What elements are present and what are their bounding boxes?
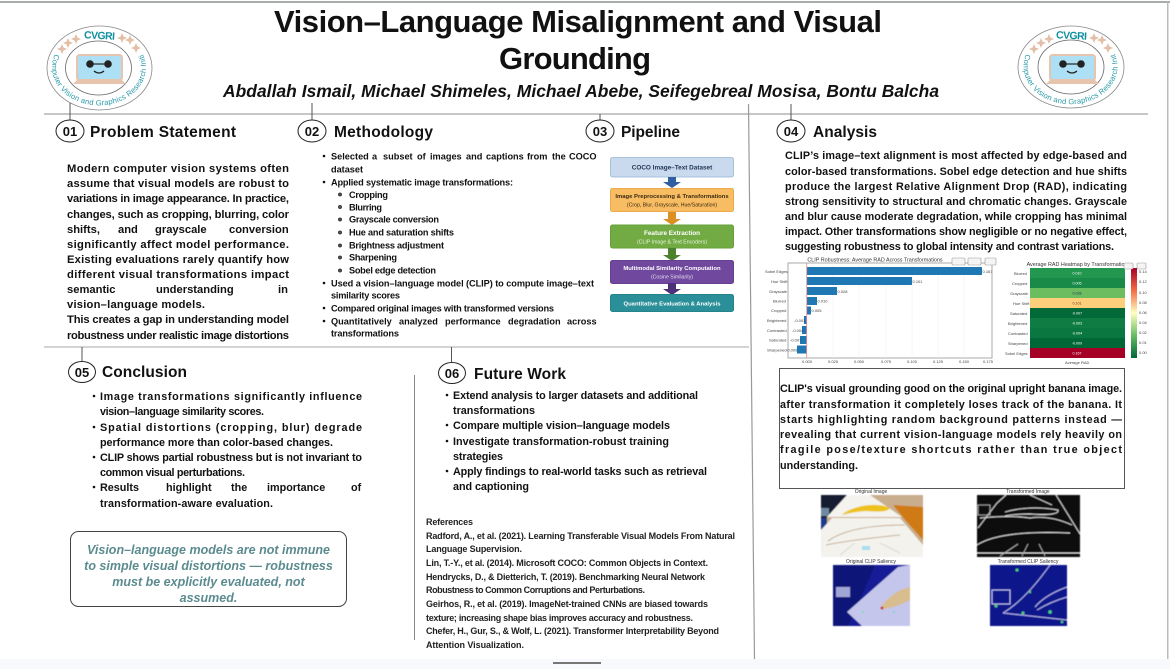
bar chart: average RAD across transformations: -0.004 [792, 328, 804, 333]
bar chart: average RAD across transformations: -0.009 [786, 348, 798, 352]
heatmap: average RAD by transformation: 0.12 [1139, 279, 1148, 284]
callout: key takeaway: assumed. [180, 591, 237, 605]
logo: CVGRI right: CVGRI [1056, 29, 1087, 43]
heatmap: average RAD by transformation: 0.08 [1139, 300, 1148, 305]
references: Language Supervision. [426, 544, 522, 554]
conclusion list: highlight [166, 482, 212, 494]
heading: problem statement: Problem Statement [90, 124, 236, 141]
future work list: Compare multiple vision–language models [453, 420, 670, 432]
problem text: Modern computer vision systems often [67, 163, 289, 175]
bar chart: average RAD across transformations: CLIP Robustness: Average RAD Across Transformations [807, 258, 943, 264]
arrow: green [663, 248, 681, 261]
step: preprocessing: (Crop, Blur, Grayscale, Hue/Saturation) [627, 202, 717, 208]
bar chart: average RAD across transformations: 0.000 [802, 359, 813, 364]
number badge 05: 05 [75, 365, 89, 380]
toolbar icons [1124, 263, 1146, 269]
conclusion list: performance more than color-based changes. [100, 437, 333, 449]
references: Chefer, H., Gur, S., & Wolf, L. (2021). Transformer Interpretability Beyond [426, 626, 719, 636]
conclusion list: Results [100, 482, 139, 494]
step: preprocessing [610, 188, 734, 212]
number badge 01 [56, 120, 84, 142]
callout: visual grounding [780, 368, 1124, 488]
bar chart: average RAD across transformations: Grayscale [769, 289, 788, 294]
heatmap: average RAD by transformation: 0.01 [1139, 340, 1148, 345]
methodology list: Quantitatively [331, 316, 393, 326]
heading: future work: Future Work [474, 366, 566, 383]
step: feature extraction [610, 225, 734, 248]
callout: visual grounding: revealing that current vision-language models rely heavily on [780, 429, 1122, 441]
heatmap: average RAD by transformation: Cropped [1012, 281, 1027, 286]
heatmap: average RAD by transformation: 0.04 [1139, 320, 1148, 325]
references: Hendrycks, D., & Dietterich, T. (2019). Benchmarking Neural Network [426, 572, 706, 582]
panel: methodology [298, 103, 597, 338]
step: dataset [610, 158, 734, 177]
callout: key takeaway: must be explicitly evaluated, not [112, 575, 306, 589]
analysis text: and blur cause moderate degradation, while cropping has minimal [785, 211, 1127, 223]
problem text: significantly affect model performance. [67, 239, 289, 251]
number badge 02 [298, 120, 326, 142]
heatmap: average RAD by transformation: -0.004 [1072, 332, 1082, 336]
logo: CVGRI left [46, 26, 152, 110]
heatmap: average RAD by transformation: 0.167 [1072, 352, 1082, 356]
problem text: variations in image appearance. In practice, [67, 193, 289, 205]
bar chart: average RAD across transformations [765, 258, 996, 364]
step: preprocessing: Image Preprocessing & Transformations [615, 194, 729, 200]
future work list: and captioning [453, 481, 529, 493]
number badge 02: 02 [305, 124, 319, 139]
analysis text: produce the largest Relative Alignment Drop (RAD), indicating [785, 181, 1127, 193]
analysis text: impact. Other transformations show negligible or no negative effect, [785, 226, 1127, 238]
image: transformed [977, 489, 1080, 557]
future work list: Investigate transformation-robust training [453, 436, 669, 448]
methodology list: performance [445, 316, 501, 326]
methodology list: across [567, 316, 597, 326]
heatmap: average RAD by transformation: Sobel Edges [1005, 351, 1028, 356]
panel: problem statement [56, 103, 290, 342]
conclusion list: transformation-aware evaluation. [100, 498, 273, 510]
problem text: grayscale [155, 224, 207, 236]
conclusion list: Image transformations significantly influence [100, 391, 362, 403]
step: evaluation: Quantitative Evaluation & Analysis [623, 302, 721, 308]
methodology list: transformations [331, 328, 399, 338]
heatmap: average RAD by transformation: -0.007 [1072, 312, 1082, 316]
bar chart: average RAD across transformations: Sharpened [767, 348, 787, 352]
heatmap: average RAD by transformation: 0.005 [1072, 282, 1082, 286]
heatmap: average RAD by transformation: -0.003 [1072, 322, 1082, 326]
references: References [426, 517, 473, 527]
problem text: and [118, 224, 138, 236]
arrow: orange [663, 212, 681, 225]
bar chart: average RAD across transformations: 0.150 [959, 359, 970, 364]
methodology list: subset [383, 152, 413, 162]
methodology list: captions [486, 152, 524, 162]
methodology list: Hue and saturation shifts [349, 228, 454, 238]
methodology list: Used a vision–language model (CLIP) to compute image–text [331, 278, 594, 288]
references: Attention Visualization. [426, 640, 524, 650]
conclusion list: of [351, 482, 362, 494]
number badge 05 [68, 362, 96, 382]
problem text: understanding [156, 284, 234, 296]
number badge 04: 04 [784, 124, 799, 139]
bar chart: average RAD across transformations: 0.025 [828, 359, 839, 364]
problem text: assume that visual models are robust to [67, 178, 289, 190]
image: original [821, 489, 923, 557]
methodology list: degradation [508, 316, 561, 326]
references: Robustness to Common Corruptions and Perturbations. [426, 585, 645, 595]
authors: Abdallah Ismail, Michael Shimeles, Michael Abebe, Seifegebreal Mosisa, Bontu Balcha [222, 81, 939, 101]
number badge 06 [438, 362, 466, 384]
future work list [446, 390, 707, 493]
analysis text: strong sensitivity to structural and chromatic changes. Grayscale [785, 196, 1127, 208]
number badge 04 [777, 120, 805, 142]
references: Radford, A., et al. (2021). Learning Transferable Visual Models From Natural [426, 531, 735, 541]
callout: visual grounding: starts highlighting random background patterns instead — [780, 414, 1122, 426]
conclusion list: Spatial distortions (cropping, blur) degrade [100, 422, 362, 434]
heatmap: average RAD by transformation: Average RAD [1065, 360, 1089, 365]
panel: analysis [765, 104, 1148, 626]
title: Grounding [499, 41, 651, 76]
methodology list: Grayscale conversion [349, 214, 439, 224]
methodology list: COCO [569, 152, 597, 162]
step: dataset: COCO Image–Text Dataset [632, 164, 713, 172]
conclusion list: common visual perturbations. [100, 467, 245, 479]
methodology list: and [466, 152, 482, 162]
future work list: Extend analysis to larger datasets and additional [453, 390, 698, 402]
references: texture; increasing shape bias improves accuracy and robustness. [426, 613, 693, 623]
future work list: strategies [453, 451, 503, 463]
panel: future work [426, 347, 735, 650]
heatmap: average RAD by transformation: 0.010 [1072, 272, 1082, 276]
step: similarity: (Cosine Similarity) [651, 274, 693, 280]
problem text: different visual transformations impact [67, 269, 289, 281]
analysis text: suggesting robustness to global intensity and contrast variations. [785, 241, 1114, 253]
bar chart: average RAD across transformations: Contrasted [767, 328, 787, 333]
step: feature extraction: Feature Extraction [644, 230, 700, 237]
bar chart: average RAD across transformations: 0.010 [818, 298, 828, 304]
image: transformed: Transformed Image [1006, 489, 1050, 495]
number badge 06: 06 [445, 366, 459, 381]
heading: pipeline: Pipeline [621, 124, 680, 141]
conclusion list: the [231, 482, 247, 494]
future work list: Apply findings to real-world tasks such as retrieval [453, 466, 707, 478]
bar chart: average RAD across transformations: 0.175 [983, 359, 994, 364]
bar chart: average RAD across transformations: Hue Shift [771, 279, 788, 284]
heading: analysis: Analysis [813, 124, 877, 141]
problem text: robustness under realistic image distortions [67, 330, 289, 342]
callout: visual grounding: CLIP's visual grounding good on the original upright banana image. [780, 383, 1122, 395]
problem text: changes, such as cropping, blurring, color [67, 209, 290, 221]
conclusion list: CLIP shows partial robustness but is not invariant to [100, 452, 362, 464]
heatmap: average RAD by transformation: 0.14 [1139, 269, 1148, 274]
panel: pipeline [586, 114, 734, 312]
references: Lin, T.-Y., et al. (2014). Microsoft COCO: Common Objects in Context. [426, 558, 708, 568]
image: transformed saliency: Transformed CLIP Saliency [998, 559, 1059, 565]
methodology list: images [430, 152, 462, 162]
references: Geirhos, R., et al. (2019). ImageNet-trained CNNs are biased towards [426, 599, 708, 609]
logo: CVGRI right [1018, 26, 1124, 108]
conclusion list: vision–language similarity scores. [100, 406, 264, 418]
problem text [67, 163, 290, 342]
methodology list: Compared original images with transformed versions [331, 304, 554, 314]
callout: key takeaway: to simple visual distortions — robustness [84, 559, 333, 573]
methodology list: the [552, 152, 566, 162]
methodology list: similarity scores [331, 290, 400, 300]
toolbar icons [952, 258, 996, 265]
methodology list: from [527, 152, 547, 162]
heatmap: average RAD by transformation: 0.10 [1139, 290, 1148, 295]
problem text: vision–language models. [67, 299, 205, 311]
number badge 01: 01 [63, 124, 77, 139]
bar chart: average RAD across transformations: 0.167 [982, 269, 993, 274]
callout: key takeaway: Vision–language models are not immune [87, 543, 330, 557]
methodology list: analyzed [399, 316, 438, 326]
step: evaluation [610, 294, 734, 312]
heading: methodology: Methodology [334, 124, 433, 141]
problem text: in [278, 284, 288, 296]
analysis text: CLIP’s image–text alignment is most affected by edge-based and [785, 150, 1127, 162]
logo: CVGRI left: CVGRI [84, 29, 115, 43]
step: similarity: Multimodal Similarity Computation [623, 266, 721, 272]
methodology list: Sharpening [349, 252, 397, 262]
arrow: purple [663, 283, 681, 295]
methodology list: a [372, 152, 378, 162]
callout: visual grounding: fragile pose/texture shortcuts rather than true object [780, 444, 1122, 456]
callout: visual grounding: after transformation it completely loses track of the banana. It [780, 399, 1122, 411]
bar chart: average RAD across transformations: -0.003 [794, 318, 806, 323]
analysis text: color-based transformations. Sobel edge detection and hue shifts [785, 166, 1127, 178]
bar chart: average RAD across transformations: Brightened [767, 318, 786, 323]
callout: key takeaway [70, 532, 346, 606]
heatmap: average RAD by transformation [1005, 262, 1148, 365]
heatmap: average RAD by transformation: 0.00 [1139, 350, 1148, 355]
heatmap: average RAD by transformation: Blurred [1014, 271, 1027, 276]
bar chart: average RAD across transformations: Saturated [769, 338, 786, 342]
heading: conclusion: Conclusion [102, 364, 187, 381]
problem text: shifts, [67, 224, 100, 236]
heatmap: average RAD by transformation: 0.101 [1072, 302, 1082, 306]
title [274, 4, 882, 76]
title: Vision–Language Misalignment and Visual [274, 4, 882, 39]
heatmap: average RAD by transformation: Average RAD Heatmap by Transformation [1027, 262, 1127, 268]
bar chart: average RAD across transformations: Sobel Edges [765, 269, 788, 274]
methodology list: Selected [331, 152, 369, 162]
problem text: semantic [67, 284, 116, 296]
heatmap: average RAD by transformation: Grayscale [1010, 291, 1029, 296]
heatmap: average RAD by transformation: 0.06 [1139, 310, 1148, 315]
image: original saliency [833, 559, 910, 626]
methodology list: Cropping [349, 190, 388, 200]
heatmap: average RAD by transformation: 0.02 [1139, 330, 1148, 335]
image grid: saliency comparison [821, 489, 1080, 626]
analysis text [785, 150, 1127, 253]
heatmap: average RAD by transformation: Hue Shift [1013, 301, 1030, 306]
future work list: transformations [453, 405, 535, 417]
methodology list: Brightness adjustment [349, 240, 444, 250]
methodology list: dataset [331, 164, 363, 174]
bar chart: average RAD across transformations: -0.007 [790, 338, 802, 342]
methodology list: Blurring [349, 202, 382, 212]
bar chart: average RAD across transformations: Cropped [771, 308, 786, 313]
problem text: conversion [229, 224, 289, 236]
bar chart: average RAD across transformations: 0.075 [881, 359, 892, 364]
bar chart: average RAD across transformations: 0.005 [812, 308, 822, 313]
image: transformed saliency [990, 559, 1067, 626]
bar chart: average RAD across transformations: 0.101 [912, 279, 923, 284]
conclusion list [93, 391, 362, 510]
heatmap: average RAD by transformation: Sharpened [1008, 341, 1028, 346]
step: feature extraction: (CLIP Image & Text Encoders) [637, 240, 707, 246]
bar chart: average RAD across transformations: 0.125 [933, 359, 944, 364]
arrow: blue [663, 177, 681, 188]
bar chart: average RAD across transformations: 0.100 [907, 359, 918, 364]
references [426, 517, 735, 650]
heatmap: average RAD by transformation: -0.009 [1072, 342, 1082, 346]
number badge 03: 03 [593, 124, 607, 139]
image: original saliency: Original CLIP Saliency [846, 559, 896, 565]
problem text: Existing evaluations rarely quantify how [67, 254, 289, 266]
callout: visual grounding: understanding. [780, 460, 858, 472]
methodology list [323, 152, 597, 338]
panel: conclusion [68, 347, 362, 510]
methodology list: of [417, 152, 427, 162]
step: similarity [610, 260, 734, 284]
number badge 03 [586, 120, 614, 142]
bar chart: average RAD across transformations: 0.050 [854, 359, 865, 364]
image: original: Original Image [855, 489, 887, 495]
problem text: This creates a gap in understanding model [67, 314, 289, 326]
bar chart: average RAD across transformations: 0.028 [838, 289, 848, 294]
conclusion list: importance [267, 482, 325, 494]
bar chart: average RAD across transformations: Blurred [773, 298, 786, 304]
pipeline flow diagram [610, 158, 734, 312]
methodology list: Applied systematic image transformations: [331, 178, 513, 188]
heatmap: average RAD by transformation: Brightened [1008, 321, 1027, 326]
heatmap: average RAD by transformation: Contrasted [1008, 331, 1028, 336]
heatmap: average RAD by transformation: Saturated [1010, 311, 1027, 316]
heatmap: average RAD by transformation: 0.028 [1072, 292, 1082, 296]
methodology list: Sobel edge detection [349, 266, 436, 276]
